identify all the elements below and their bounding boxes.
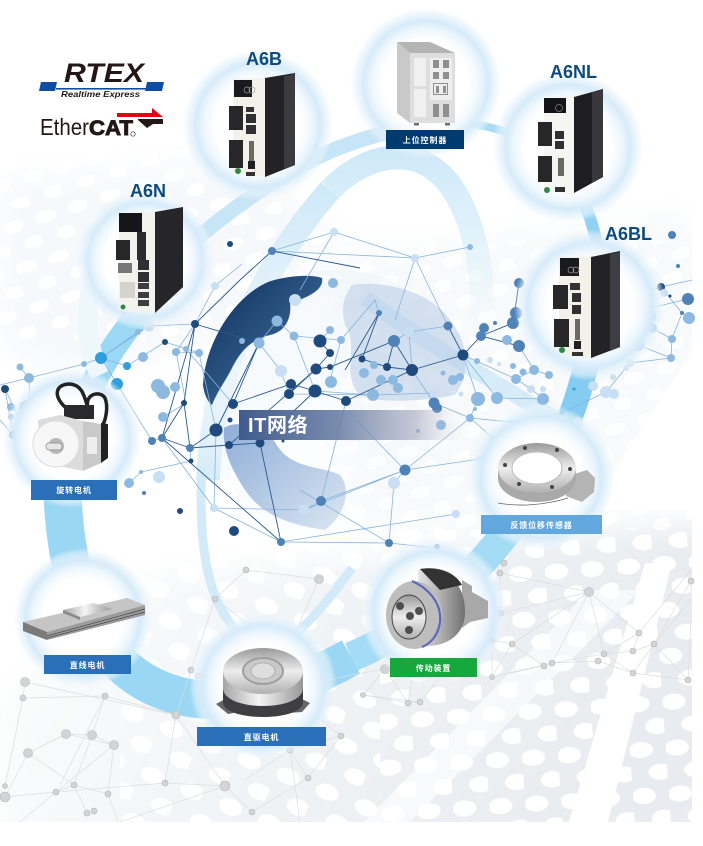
icon: reduction gear	[386, 568, 488, 649]
logo: EtherCAT: CAT	[89, 117, 133, 140]
icon: A6NL servo drive	[538, 89, 603, 195]
label: 直线电机	[70, 660, 105, 670]
logo: EtherCAT: Ether	[40, 114, 89, 140]
network: grey lines	[5, 563, 691, 822]
heading: A6NL	[550, 62, 597, 82]
panel: upper controller	[350, 7, 502, 159]
icon: ring sensor	[498, 443, 595, 505]
panel: rotary motor	[2, 368, 142, 508]
icon: A6N servo drive	[116, 207, 183, 313]
logo: RTEX	[39, 58, 164, 99]
label: 直驱电机	[244, 732, 279, 742]
label: 旋转电机	[56, 485, 92, 495]
continent: north-east	[343, 284, 466, 401]
network: grey nodes	[0, 560, 694, 816]
label	[386, 130, 464, 149]
network: blue nodes	[1, 228, 695, 550]
icon: A6B servo drive	[229, 73, 295, 177]
network: blue lines	[0, 232, 692, 548]
label: 反馈位移传感器	[510, 520, 573, 530]
title banner: IT network	[239, 410, 460, 440]
label	[390, 658, 477, 677]
label: 上位控制器	[403, 135, 447, 145]
icon: direct drive motor	[216, 648, 310, 717]
panel: A6B	[182, 49, 334, 201]
icon: A6BL servo drive	[553, 251, 620, 358]
continent: south	[224, 424, 346, 530]
heading: A6B	[246, 49, 282, 69]
title banner: IT network: IT网络	[248, 413, 308, 437]
panel: transmission device	[360, 538, 508, 686]
panel: linear motor	[13, 548, 153, 688]
panel: feedback displacement sensor	[467, 403, 615, 551]
icon: controller cabinet	[397, 42, 455, 126]
continent: dark north-west	[203, 276, 322, 405]
panel: direct drive motor	[189, 612, 337, 760]
panel: A6N	[75, 181, 215, 330]
connection bands	[62, 122, 600, 700]
icon: rotary servo motor	[33, 384, 108, 471]
icon: linear actuator	[23, 598, 145, 640]
panel: A6NL	[492, 62, 644, 223]
panel: A6BL	[514, 224, 666, 381]
globe	[203, 270, 473, 540]
label: 传动装置	[416, 663, 451, 673]
heading: A6N	[130, 181, 166, 201]
label	[481, 515, 602, 534]
heading: A6BL	[605, 224, 652, 244]
logo: EtherCAT	[40, 108, 163, 140]
label	[197, 727, 326, 746]
logo: RTEX: RTEX	[64, 58, 146, 88]
logo: RTEX: Realtime Express	[61, 89, 140, 99]
